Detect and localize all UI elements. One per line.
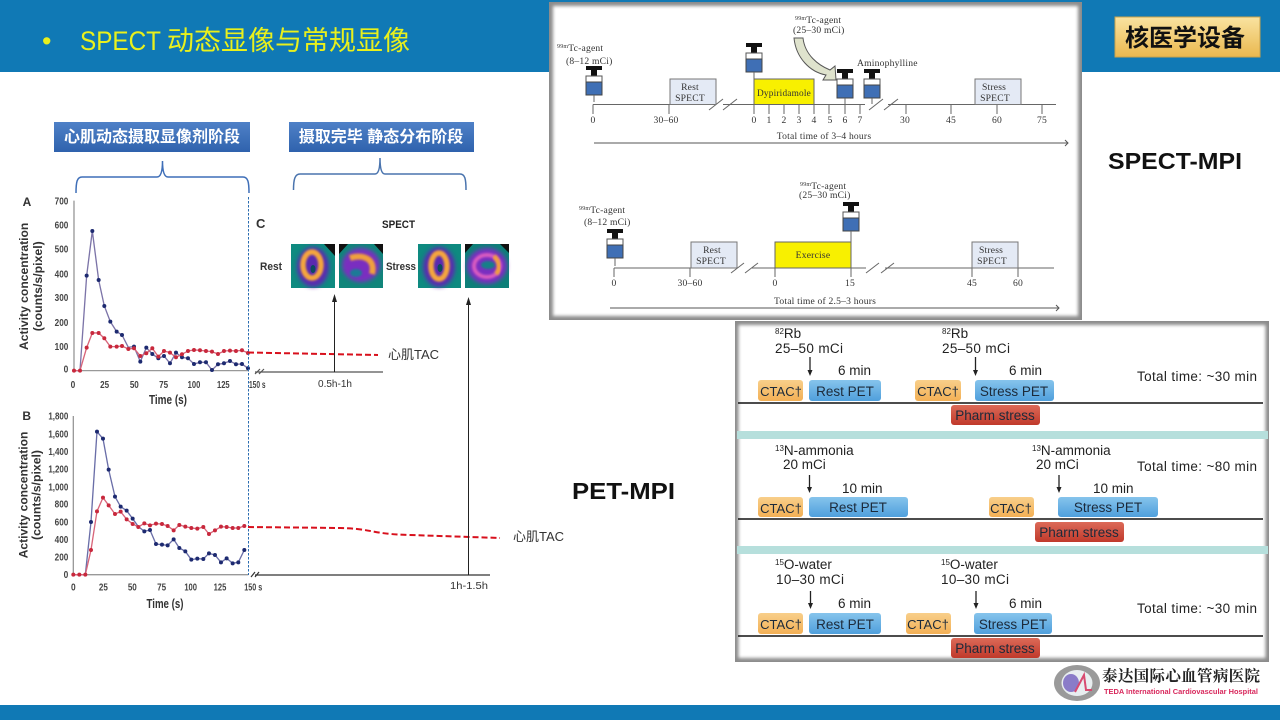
chart B: activity concentration: 800 (55, 500, 69, 511)
box: stress PET: Stress PET (979, 617, 1047, 632)
divider band 1 (737, 431, 1268, 439)
box: pharm stress: Pharm stress (955, 408, 1035, 423)
label: static distribution phase (289, 122, 474, 152)
box: rest SPECT lower: SPECT (696, 256, 726, 267)
box: CTAC: CTAC† (760, 617, 802, 632)
box: rest PET (809, 380, 881, 401)
label: myocardial uptake phase: 心肌动态摄取显像剂阶段 (64, 127, 240, 146)
label: myocardial TAC upper: 心肌TAC (388, 347, 439, 362)
red dashed TAC extension A (248, 352, 378, 355)
chart A: activity concentration: 300 (55, 293, 69, 304)
box: pharm stress: Pharm stress (1039, 525, 1119, 540)
syringe 2 (746, 43, 762, 80)
protocol: dipyridamole stress (557, 15, 1068, 146)
tick labels upper: 75 (1037, 115, 1047, 126)
tick labels upper: 45 (946, 115, 956, 126)
heart scan 2 (339, 244, 383, 288)
row: ammonia: 13 (775, 444, 784, 453)
row: water: 6 min (838, 596, 871, 611)
time label 1h-1.5h: 1h-1.5h (450, 581, 488, 592)
row: water: 10–30 mCi (776, 572, 844, 587)
chart B: activity concentration: 1,000 (48, 482, 69, 493)
chart B: activity concentration: 200 (55, 553, 69, 564)
total time lower: Total time of 2.5–3 hours (774, 296, 876, 307)
box: rest SPECT lower: Rest (703, 245, 721, 256)
total arrow lower (610, 305, 1059, 311)
row: rubidium: 25–50 mCi (942, 341, 1010, 356)
row: ammonia: 20 mCi (1036, 457, 1079, 472)
total time upper: Total time of 3–4 hours (777, 131, 871, 142)
chart B: activity concentration: 50 (128, 583, 137, 594)
chart A: activity concentration: 125 (217, 380, 230, 391)
text: second tracer dose: (25–30 mCi) (793, 25, 844, 36)
chart A: activity concentration: A (23, 195, 32, 209)
heart scan 4 (465, 244, 509, 288)
panel: PET-MPI protocols (735, 321, 1269, 662)
chart B: activity concentration: 600 (55, 517, 69, 528)
tick labels upper: 0 (752, 115, 756, 126)
box: rest SPECT: Rest (681, 82, 699, 93)
y axis title B: Activity concentration (17, 432, 31, 558)
row: water: 10–30 mCi (941, 572, 1009, 587)
total arrow upper (594, 140, 1068, 146)
box: rest PET: Rest PET (816, 617, 874, 632)
chart A: activity concentration: 50 (130, 380, 139, 391)
chart A: activity concentration: 400 (55, 269, 69, 280)
box: pharm stress (951, 638, 1040, 658)
tick labels upper: 30–60 (654, 115, 678, 126)
row: water (738, 557, 1263, 658)
y axis title A: (counts/s/pixel) (31, 241, 45, 331)
box: rest SPECT: SPECT (675, 93, 705, 104)
x axis title A: Time (s) (149, 393, 187, 407)
box: rest SPECT (670, 79, 716, 104)
box: stress SPECT: SPECT (980, 93, 1010, 104)
total time: Total time: ~30 min (1137, 601, 1257, 616)
box: stress PET (1058, 497, 1158, 517)
row: rubidium: Rb (951, 326, 968, 341)
chart A: activity concentration: 600 (55, 221, 69, 232)
box: exercise: Exercise (796, 250, 830, 261)
divider band 2 (737, 546, 1268, 554)
tick labels upper: 60 (992, 115, 1002, 126)
label: myocardial TAC lower: 心肌TAC (513, 529, 564, 544)
chart A: activity concentration: 700 (55, 197, 69, 208)
box: stress PET (975, 380, 1054, 401)
box: dipyridamole: Dypiridamole (757, 89, 811, 99)
arrow: 1h-1.5h (466, 297, 471, 575)
box: CTAC second: CTAC† (917, 384, 959, 399)
chart A: activity concentration: 0 (71, 380, 76, 391)
row: rubidium: 25–50 mCi (775, 341, 843, 356)
chart B: activity concentration: 1,200 (48, 465, 69, 476)
row: rubidium: 6 min (1009, 363, 1042, 378)
tick labels lower: 30–60 (678, 278, 702, 289)
continuation axis B (251, 572, 490, 577)
box: stress SPECT (975, 79, 1021, 104)
chart A: activity concentration: 200 (55, 318, 69, 329)
panel C: SPECT images: C (256, 216, 266, 231)
row: water: 15 (775, 558, 784, 567)
title: SPECT (80, 26, 161, 56)
title: • (42, 26, 51, 56)
box: stress SPECT: Stress (982, 82, 1006, 93)
box: CTAC second (989, 497, 1034, 517)
top header bar (0, 0, 1280, 72)
chart B: activity concentration: 1,800 (48, 411, 69, 422)
chart B: activity concentration: 0 (64, 570, 69, 581)
box: rest PET: Rest PET (829, 500, 887, 515)
bottom footer bar (0, 705, 1280, 720)
box: stress PET: Stress PET (980, 384, 1048, 399)
box: CTAC (758, 613, 803, 634)
arrow: 0.5h-1h (332, 294, 337, 372)
box: pharm stress (1035, 522, 1124, 542)
chart B: activity concentration: 150 s (244, 583, 263, 594)
tick labels lower (612, 278, 1023, 289)
row: rubidium: 82 (775, 327, 784, 336)
text: first tracer dose: 99m (557, 44, 568, 50)
tick labels lower: 0 (772, 278, 778, 289)
row: rubidium: 82 (942, 327, 951, 336)
box: CTAC second: CTAC† (907, 617, 949, 632)
syringe lower 1 (607, 229, 623, 266)
syringe lower 2 (843, 202, 859, 242)
box: stress SPECT lower (972, 242, 1018, 268)
chart B: activity concentration: 1,600 (48, 430, 69, 441)
box: CTAC second: CTAC† (990, 501, 1032, 516)
row: ammonia: 10 min (842, 481, 883, 496)
text: second tracer lower: Tc-agent (811, 181, 846, 192)
text: first tracer dose: (8–12 mCi) (566, 56, 613, 67)
syringe 1 (586, 66, 602, 102)
badge: nuclear medicine equipment (1115, 17, 1260, 57)
label: static distribution phase: 摄取完毕 静态分布阶段 (299, 127, 463, 146)
chart B: activity concentration (17, 409, 263, 594)
label: myocardial uptake phase (54, 122, 250, 152)
logo emblem (1054, 665, 1100, 701)
chart B: activity concentration: 125 (214, 583, 227, 594)
y axis title B: (counts/s/pixel) (29, 450, 43, 540)
text: second tracer dose: Tc-agent (806, 15, 841, 26)
box: stress PET (974, 613, 1052, 634)
hospital English name: TEDA International Cardiovascular Hospital (1104, 687, 1258, 696)
panel: SPECT-MPI protocols (549, 2, 1082, 320)
row: water: 15 (941, 558, 950, 567)
chart B: activity concentration: 0 (71, 583, 76, 594)
panel C: SPECT images: Stress (386, 261, 416, 273)
chart B: activity concentration: 75 (157, 583, 167, 594)
chart A: activity concentration: 500 (55, 245, 69, 256)
text: aminophylline: Aminophylline (857, 58, 918, 69)
panel C: SPECT images: SPECT (382, 219, 415, 231)
text: first tracer dose: Tc-agent (568, 43, 603, 54)
row: ammonia (738, 443, 1263, 542)
row: ammonia: 13 (1032, 444, 1041, 453)
row: rubidium (738, 326, 1263, 425)
panel C: SPECT images (256, 216, 509, 288)
tick labels lower: 0 (612, 278, 616, 289)
heart scan 1 (291, 244, 335, 288)
time label 0.5h-1h: 0.5h-1h (318, 379, 352, 390)
y axis title A: Activity concentration (17, 223, 31, 350)
box: CTAC (758, 497, 803, 517)
row: ammonia: 20 mCi (783, 457, 826, 472)
box: stress SPECT lower: Stress (979, 245, 1003, 256)
box: rest PET: Rest PET (816, 384, 874, 399)
tick labels lower: 45 (967, 278, 977, 289)
hospital logo (1054, 664, 1260, 701)
total time: Total time: ~30 min (1137, 369, 1257, 384)
row: rubidium: Rb (784, 326, 801, 341)
tick labels upper: 2 (782, 115, 786, 126)
tick labels upper: 4 (812, 115, 816, 126)
box: rest PET (809, 613, 881, 634)
brace: uptake phase (76, 161, 249, 193)
tick labels lower: 15 (845, 278, 855, 289)
box: pharm stress (951, 405, 1040, 425)
chart A: activity concentration: 100 (55, 342, 69, 353)
tick labels upper: 0 (590, 115, 596, 126)
row: ammonia: 10 min (1093, 481, 1134, 496)
box: rest PET (809, 497, 908, 517)
chart A: activity concentration: 75 (159, 380, 169, 391)
badge: nuclear medicine equipment: 核医学设备 (1125, 25, 1245, 52)
text: first tracer lower: Tc-agent (590, 205, 625, 216)
syringe 4 (864, 69, 880, 104)
brace: static phase (294, 158, 466, 190)
box: stress PET: Stress PET (1074, 500, 1142, 515)
chart A: activity concentration: 25 (100, 380, 110, 391)
box: exercise (775, 242, 851, 268)
chart B: activity concentration: 25 (99, 583, 108, 594)
chart A: activity concentration: 150 s (249, 380, 266, 391)
tick labels upper: 3 (796, 115, 802, 126)
chart B: activity concentration: 100 (184, 583, 197, 594)
text: second tracer dose: 99m (795, 16, 806, 22)
y axis title B (17, 432, 43, 558)
chart B: activity concentration: B (22, 409, 31, 423)
tick labels upper: 6 (842, 115, 848, 126)
tick labels upper: 7 (858, 115, 862, 126)
row: water: O-water (784, 557, 832, 572)
row: rubidium: 6 min (838, 363, 871, 378)
tick labels lower: 60 (1013, 278, 1023, 289)
box: stress SPECT lower: SPECT (977, 256, 1007, 267)
chart A: activity concentration: 100 (188, 380, 201, 391)
chart B: activity concentration: 1,400 (48, 447, 69, 458)
title: 动态显像与常规显像 (167, 26, 410, 56)
text: second tracer lower: (25–30 mCi) (799, 190, 850, 201)
box: CTAC second (906, 613, 951, 634)
chart A: activity concentration (17, 195, 266, 391)
heading: SPECT-MPI: SPECT-MPI (1108, 148, 1242, 174)
row: water: 6 min (1009, 596, 1042, 611)
tick labels upper: 1 (766, 115, 772, 126)
protocol: exercise stress (579, 181, 1059, 311)
row: ammonia: N-ammonia (784, 443, 854, 458)
heading: PET-MPI: PET-MPI (572, 478, 675, 504)
hospital Chinese name: 泰达国际心血管病医院 (1102, 664, 1260, 686)
tick labels upper: 30 (900, 115, 910, 126)
tick labels upper (590, 115, 1047, 126)
y axis title A (17, 223, 45, 350)
panel C: SPECT images: Rest (260, 261, 282, 273)
red dashed TAC extension B (248, 527, 500, 538)
text: first tracer lower: 99m (579, 206, 590, 212)
box: CTAC: CTAC† (760, 501, 802, 516)
row: water: O-water (950, 557, 998, 572)
syringe 3 (837, 69, 853, 104)
row: ammonia: N-ammonia (1041, 443, 1111, 458)
phase divider line (248, 197, 250, 575)
box: dipyridamole (754, 79, 814, 104)
text: second tracer lower: 99m (800, 182, 811, 188)
box: CTAC: CTAC† (760, 384, 802, 399)
tick labels upper: 5 (828, 115, 832, 126)
chart A: activity concentration: 0 (64, 364, 69, 375)
box: rest SPECT lower (691, 242, 737, 268)
box: CTAC second (915, 380, 961, 401)
heart scan 3 (418, 244, 461, 288)
box: CTAC (758, 380, 803, 401)
total time: Total time: ~80 min (1137, 459, 1257, 474)
box: pharm stress: Pharm stress (955, 641, 1035, 656)
curved arrow (794, 38, 836, 80)
text: first tracer lower: (8–12 mCi) (584, 217, 631, 228)
x axis title B: Time (s) (146, 597, 184, 611)
chart B: activity concentration: 400 (55, 535, 69, 546)
continuation axis A (255, 369, 383, 374)
